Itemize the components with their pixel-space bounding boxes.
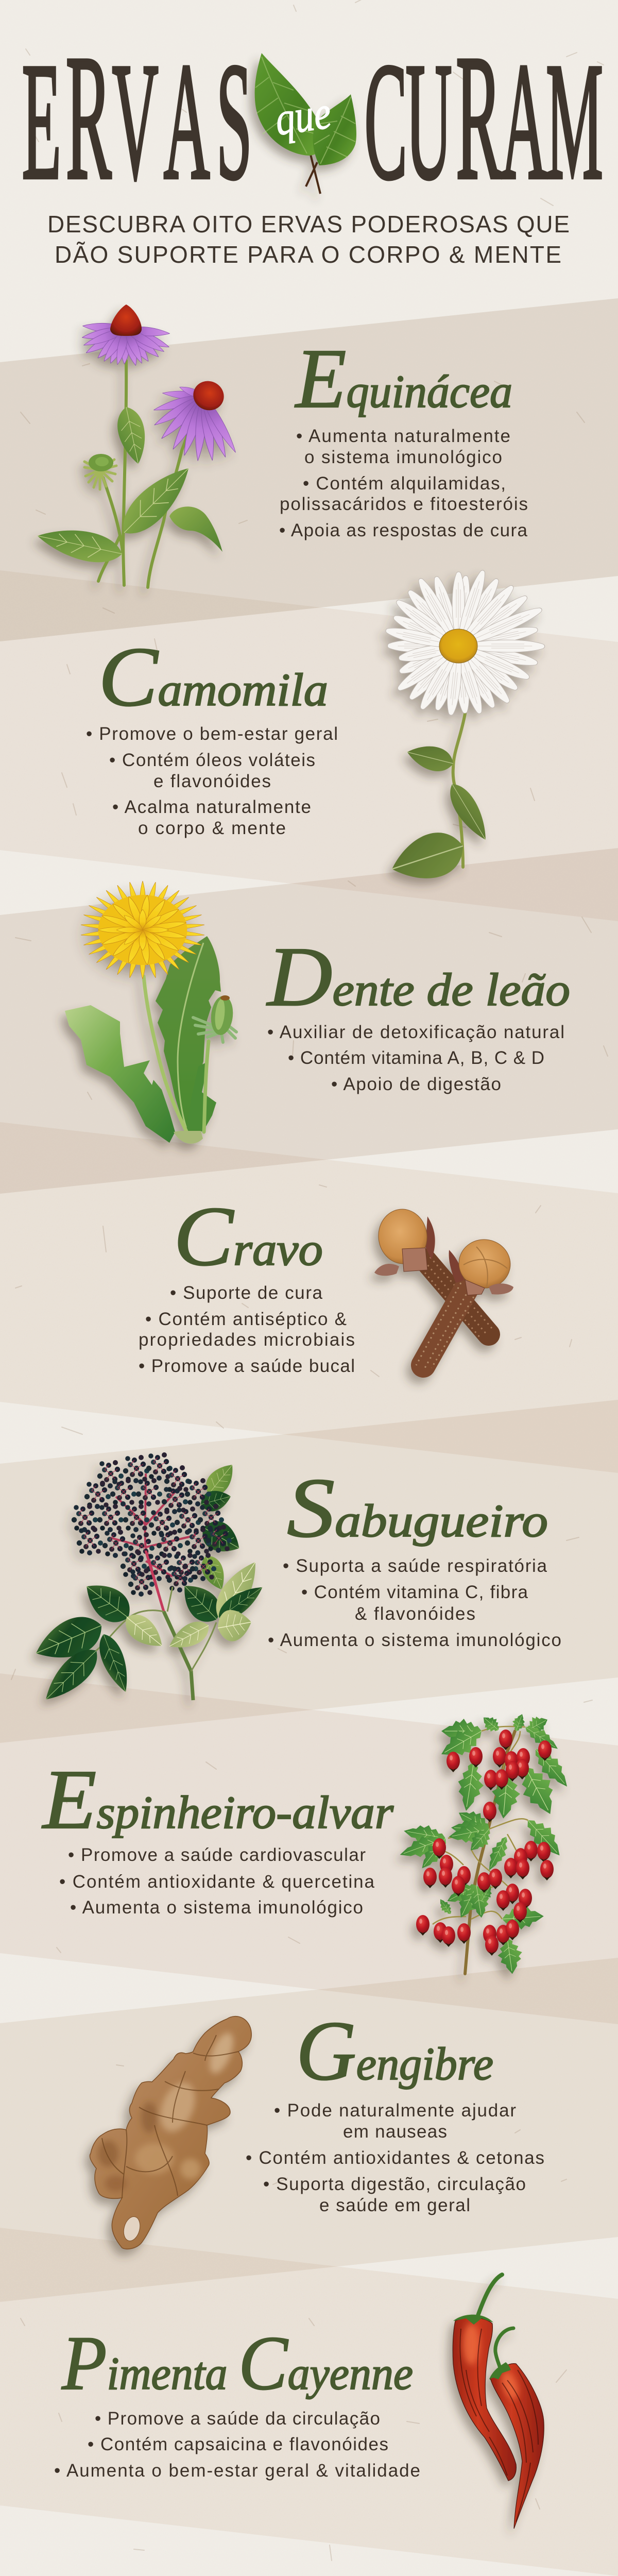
illustration: cayenne peppers	[453, 2275, 544, 2529]
panel: Gengibre	[90, 2004, 544, 2249]
panel band: Cravo	[0, 1122, 618, 1473]
list	[267, 1022, 564, 1094]
illustration: clove	[374, 1207, 514, 1368]
list: • Contém antioxidantes & cetonas	[246, 2148, 544, 2168]
list: o sistema imunológico	[304, 447, 502, 467]
list: • Contém capsaicina e flavonóides	[88, 2434, 388, 2454]
list: • Promove a saúde da circulação	[95, 2409, 380, 2429]
list: • Contém alquilamidas,	[303, 473, 506, 494]
panel band: Camomila	[0, 570, 618, 921]
list	[279, 426, 528, 540]
panel: Dente de leão	[65, 881, 570, 1144]
panel band: Gengibre	[0, 1958, 618, 2302]
list: • Contém antiséptico &	[145, 1309, 347, 1329]
heading: Camomila	[98, 630, 328, 724]
list: e saúde em geral	[319, 2195, 470, 2215]
panel: Sabugueiro	[29, 1452, 561, 1709]
list: • Suporta digestão, circulação	[263, 2174, 526, 2194]
heading: Cravo	[174, 1189, 323, 1283]
heading word: CURAM: CURAM	[365, 19, 603, 217]
panel: Espinheiro-alvar	[42, 1711, 575, 1975]
illustration: echinacea	[35, 304, 239, 587]
list: • Aumenta naturalmente	[296, 426, 510, 446]
panel: Pimenta Cayenne	[54, 2275, 544, 2529]
list: • Pode naturalmente ajudar	[274, 2100, 516, 2121]
list: • Suporte de cura	[170, 1283, 323, 1303]
panel: Camomila	[86, 568, 545, 890]
heading: Equinácea	[295, 331, 512, 426]
illustration: dandelion	[65, 881, 236, 1144]
list: • Aumenta o sistema imunológico	[70, 1897, 363, 1918]
list: o corpo & mente	[138, 818, 286, 838]
subtitle: DÃO SUPORTE PARA O CORPO & MENTE	[55, 241, 561, 268]
panel: Equinácea	[35, 304, 528, 587]
list	[139, 1283, 355, 1376]
heading word: que: que	[272, 87, 334, 145]
illustration: daisy	[385, 568, 545, 890]
list	[59, 1845, 375, 1918]
list	[54, 2409, 420, 2481]
illustration: ginger root	[90, 2016, 251, 2249]
list: polissacáridos e fitoesteróis	[280, 494, 528, 514]
list: • Apoia as respostas de cura	[279, 520, 528, 540]
panel band: Pimenta Cayenne	[0, 2228, 618, 2576]
list: • Suporta a saúde respiratória	[283, 1556, 547, 1576]
heading: Espinheiro-alvar	[42, 1752, 394, 1846]
subtitle: DESCUBRA OITO ERVAS PODEROSAS QUE	[47, 211, 570, 238]
list: • Contém antioxidante & quercetina	[59, 1872, 375, 1892]
panel band: Dente de leão	[0, 848, 618, 1194]
subtitle	[47, 211, 570, 268]
illustration: hawthorn	[397, 1711, 575, 1975]
list: • Acalma naturalmente	[112, 797, 311, 817]
icon: basil leaves	[255, 53, 356, 194]
list: • Promove a saúde cardiovascular	[68, 1845, 366, 1865]
list: • Contém óleos voláteis	[109, 750, 315, 770]
list: propriedades microbiais	[139, 1330, 355, 1350]
list	[246, 2100, 544, 2215]
list: • Contém vitamina A, B, C & D	[288, 1048, 544, 1068]
panel band: Sabugueiro	[0, 1400, 618, 1743]
illustration: elderberry	[29, 1452, 268, 1709]
list	[268, 1556, 561, 1650]
heading word: ERVAS: ERVAS	[22, 19, 252, 217]
panel band: Espinheiro-alvar	[0, 1673, 618, 2024]
list: • Apoio de digestão	[331, 1074, 501, 1094]
list: • Contém vitamina C, fibra	[301, 1582, 528, 1602]
list: • Aumenta o bem-estar geral & vitalidade	[54, 2461, 420, 2481]
panel: Cravo	[139, 1189, 514, 1376]
heading: Pimenta Cayenne	[61, 2320, 413, 2406]
list	[86, 724, 338, 838]
heading: Dente de leão	[266, 929, 570, 1024]
list: & flavonóides	[355, 1604, 475, 1624]
list: • Promove a saúde bucal	[139, 1356, 355, 1376]
title: Ervas que Curam	[22, 19, 603, 217]
heading: Gengibre	[296, 2004, 493, 2098]
list: em nauseas	[343, 2122, 447, 2142]
list: e flavonóides	[153, 771, 271, 791]
heading: Sabugueiro	[287, 1461, 548, 1555]
panel band: Equinácea	[0, 298, 618, 641]
list: • Aumenta o sistema imunológico	[268, 1630, 561, 1650]
list: • Auxiliar de detoxificação natural	[267, 1022, 564, 1042]
list: • Promove o bem-estar geral	[86, 724, 338, 744]
